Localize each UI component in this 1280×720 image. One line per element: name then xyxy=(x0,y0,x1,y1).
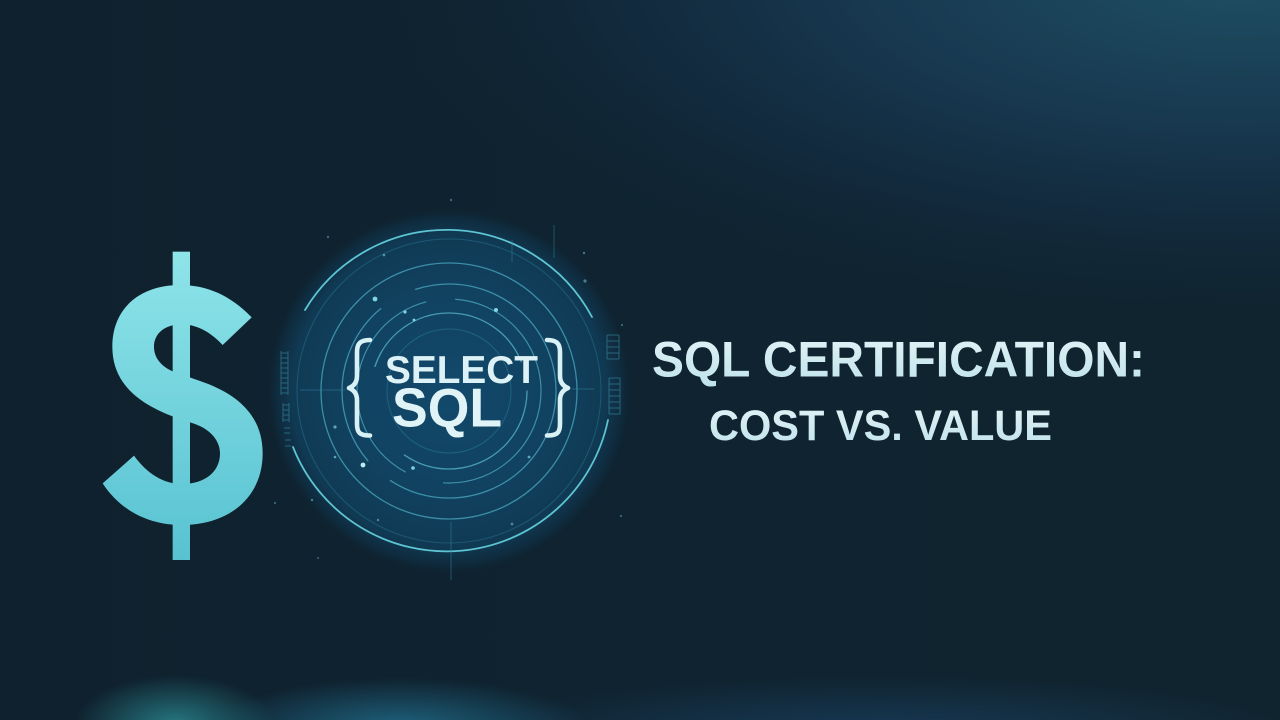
data dots xyxy=(274,199,623,559)
title line one: SQL CERTIFICATION: xyxy=(652,332,1145,388)
left brace xyxy=(349,340,370,436)
concentric rings xyxy=(293,230,608,551)
icon: dollar sign xyxy=(103,252,263,560)
crosshair lines xyxy=(300,225,594,580)
tick marks right xyxy=(607,335,620,414)
title line two: COST VS. VALUE xyxy=(709,402,1052,450)
right brace xyxy=(547,340,568,436)
tick marks left xyxy=(281,351,291,446)
bottom light glow xyxy=(70,650,1280,720)
title xyxy=(652,332,1145,450)
emblem text: SQL: SQL xyxy=(392,376,502,438)
emblem disc xyxy=(267,209,631,573)
emblem text: SELECT: SELECT xyxy=(385,349,538,392)
circular SQL emblem xyxy=(267,199,631,580)
